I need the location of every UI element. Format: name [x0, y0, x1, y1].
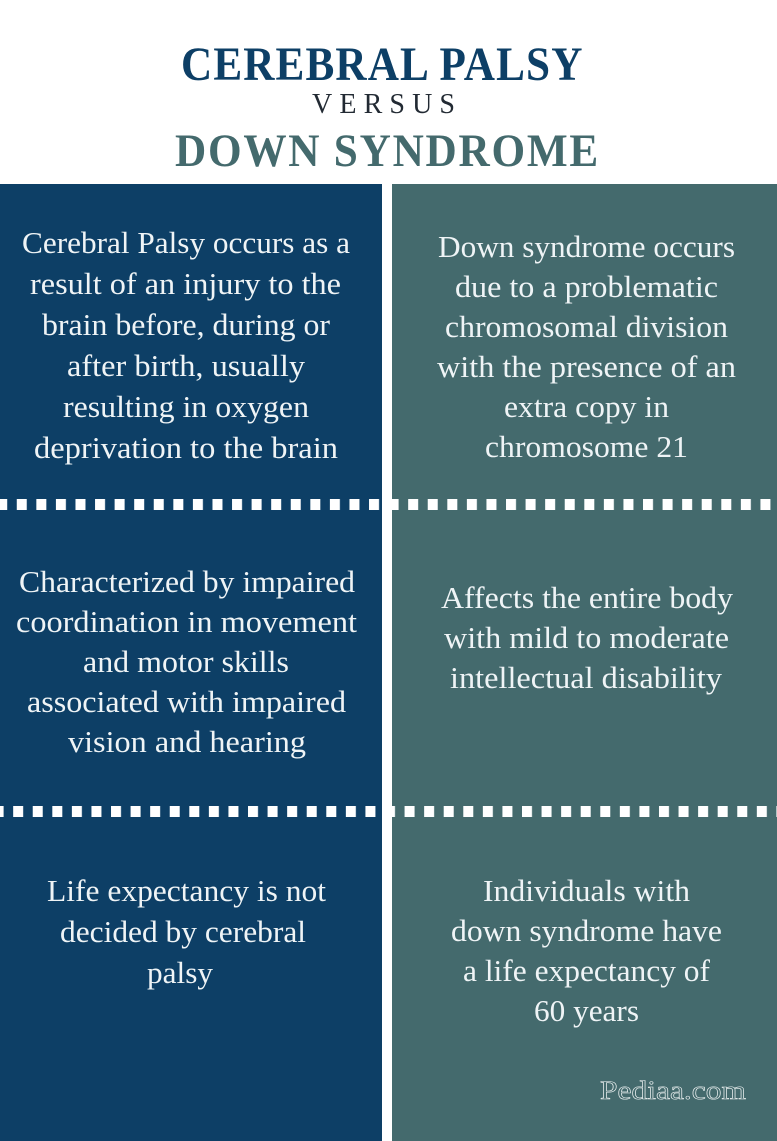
text: down syndrome cause [437, 229, 737, 464]
text: cerebral palsy characteristics: associated with impaired [27, 684, 347, 719]
text: cerebral palsy cause: deprivation to the brain [34, 430, 339, 465]
text: cerebral palsy life expectancy: palsy [147, 955, 214, 990]
heading: down syndrome: DOWN SYNDROME [175, 124, 598, 176]
dotted divider: row 1 [0, 499, 777, 510]
text: cerebral palsy cause: Cerebral Palsy occurs as a [22, 225, 350, 260]
title block [175, 37, 598, 176]
text: down syndrome cause: extra copy in [504, 389, 670, 424]
text: cerebral palsy characteristics: Characterized by impaired [19, 564, 355, 599]
text: down syndrome cause: due to a problematic [455, 269, 718, 304]
text: cerebral palsy cause [22, 225, 350, 465]
text: down syndrome cause: chromosome 21 [485, 429, 688, 464]
text: cerebral palsy life expectancy: Life expectancy is not [47, 873, 326, 908]
text: down syndrome characteristics [441, 580, 734, 695]
text: cerebral palsy life expectancy [47, 873, 326, 990]
text: down syndrome life expectancy [451, 873, 722, 1028]
text: down syndrome cause: Down syndrome occurs [438, 229, 735, 264]
dotted divider: row 2 [0, 806, 777, 817]
heading: versus: VERSUS [312, 89, 455, 120]
panel: down syndrome column [392, 184, 777, 1141]
text: down syndrome life expectancy: Individuals with [483, 873, 690, 908]
text: cerebral palsy cause: result of an injury to the [30, 266, 341, 301]
text: cerebral palsy characteristics: and motor skills [83, 644, 289, 679]
text: cerebral palsy cause: after birth, usually [67, 348, 306, 383]
panel: cerebral palsy column [0, 184, 382, 1141]
text: cerebral palsy characteristics: vision and hearing [68, 724, 306, 759]
text: cerebral palsy cause: resulting in oxygen [63, 389, 310, 424]
text: down syndrome characteristics: with mild to moderate [444, 620, 729, 655]
text: down syndrome life expectancy: down syndrome have [451, 913, 722, 948]
text: down syndrome life expectancy: a life expectancy of [463, 953, 711, 988]
text: down syndrome cause: with the presence of an [437, 349, 737, 384]
logo: Pediaa.com: Pediaa.com [600, 1076, 746, 1105]
text: cerebral palsy cause: brain before, during or [42, 307, 331, 342]
text: down syndrome characteristics: Affects the entire body [441, 580, 734, 615]
heading: cerebral palsy: CEREBRAL PALSY [181, 37, 582, 91]
text: cerebral palsy life expectancy: decided by cerebral [60, 914, 306, 949]
text: down syndrome cause: chromosomal division [445, 309, 729, 344]
text: down syndrome characteristics: intellectual disability [450, 660, 723, 695]
text: cerebral palsy characteristics: coordination in movement [16, 604, 357, 639]
text: down syndrome life expectancy: 60 years [534, 993, 639, 1028]
text: cerebral palsy characteristics [16, 564, 357, 759]
